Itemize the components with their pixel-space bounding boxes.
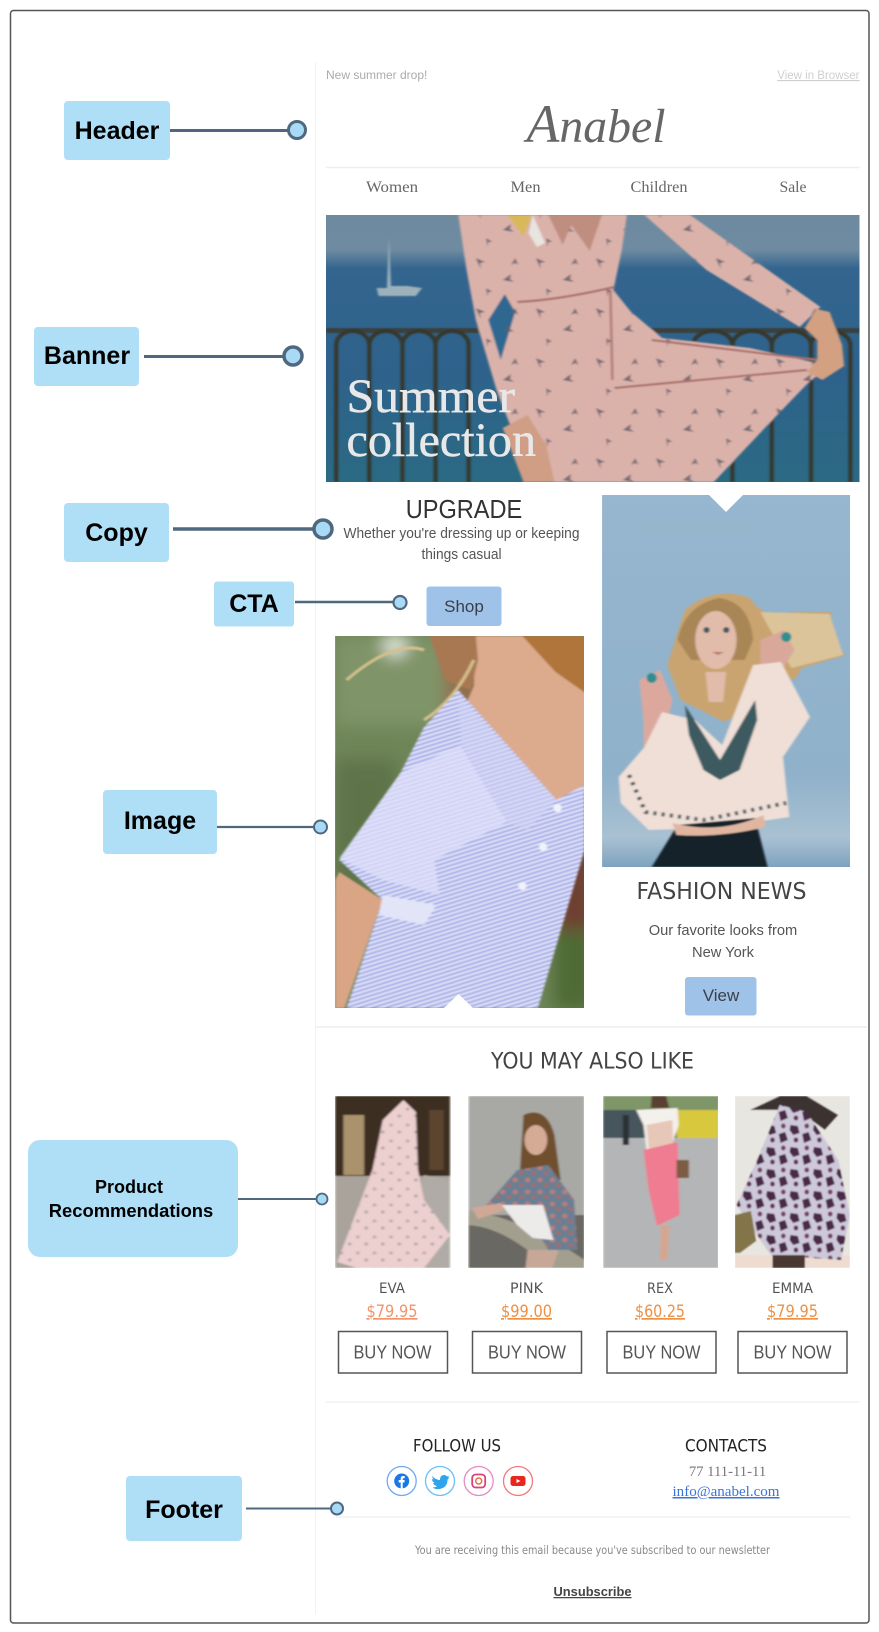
icon: instagram (464, 1466, 493, 1496)
hair (667, 594, 846, 722)
view in browser link: View in Browser (777, 70, 860, 82)
notch (444, 994, 473, 1008)
navigation menu: Sale (780, 179, 806, 196)
email link: info@anabel.com (672, 1484, 780, 1500)
product: Eva: EVA (379, 1281, 405, 1297)
callout: footer: Footer (145, 1496, 223, 1524)
callout: image (103, 790, 327, 854)
body copy: Our favorite looks from (649, 923, 797, 939)
copy block: upgrade: things casual (422, 547, 502, 563)
phone: 77 111-11-11 (689, 1464, 766, 1480)
follow us heading: FOLLOW US (413, 1436, 501, 1456)
copy block: upgrade (344, 494, 580, 563)
callout: banner: Banner (44, 342, 130, 370)
product: Pink: PINK (510, 1281, 544, 1297)
unsubscribe link: Unsubscribe (554, 1585, 632, 1599)
email header (326, 68, 860, 196)
product: Rex: $60.25 (635, 1302, 685, 1322)
button: shop: Shop (444, 597, 484, 616)
notch (709, 495, 743, 512)
callout: product recommendations (28, 1140, 328, 1257)
banner title: Summer (346, 370, 515, 423)
callout: cta: CTA (229, 590, 279, 618)
callout: copy (64, 503, 332, 562)
callout: header (64, 101, 306, 160)
navigation menu (366, 179, 806, 196)
email panel (315, 62, 868, 1614)
face and arms (695, 611, 737, 669)
heading: UPGRADE (406, 494, 522, 524)
navigation menu: Children (630, 179, 688, 196)
section heading: YOU MAY ALSO LIKE (490, 1050, 694, 1074)
button: view: View (703, 986, 740, 1005)
product: Eva: $79.95 (366, 1302, 418, 1322)
contacts heading: CONTACTS (685, 1436, 767, 1456)
heading: FASHION NEWS (636, 879, 806, 905)
banner image (326, 215, 877, 482)
copy block: fashion news (636, 879, 806, 961)
dress (458, 215, 844, 482)
disclaimer: You are receiving this email because you've subscribed to our newsletter (414, 1543, 770, 1557)
body copy: Whether you're dressing up or keeping (344, 526, 580, 542)
product: Emma: $79.95 (767, 1302, 818, 1322)
logo: Anabel (524, 94, 666, 154)
navigation menu: Men (510, 179, 540, 196)
product: Emma: BUY NOW (754, 1342, 832, 1362)
button: shop (426, 586, 502, 626)
icon: youtube (504, 1466, 532, 1496)
copy block: fashion news: New York (692, 945, 755, 961)
image: striped shirt (335, 633, 595, 1010)
callout: copy: Copy (85, 519, 148, 547)
banner title: collection (346, 414, 536, 467)
icon: twitter (426, 1466, 454, 1496)
image: fashion news model (602, 495, 867, 867)
product recommendations (335, 1050, 850, 1373)
hands (805, 309, 844, 380)
preheader text: New summer drop! (326, 68, 427, 82)
product: Pink: $99.00 (501, 1302, 552, 1322)
shirt (339, 690, 584, 1008)
navigation menu: Women (366, 179, 418, 196)
product: Pink: BUY NOW (488, 1342, 566, 1362)
callout: header: Header (75, 117, 160, 145)
icon: facebook (387, 1466, 416, 1496)
footer (336, 1436, 850, 1599)
callout: cta (214, 582, 406, 626)
product: Eva (335, 1096, 450, 1373)
blouse (619, 662, 810, 830)
product: Eva: BUY NOW (354, 1342, 432, 1362)
callout: product recommendations: Recommendations (49, 1200, 213, 1221)
product: Pink (469, 1096, 584, 1373)
callout: image: Image (124, 807, 196, 835)
product: Rex: REX (647, 1281, 673, 1297)
product: Emma (735, 1096, 850, 1373)
product: Rex: BUY NOW (622, 1342, 700, 1362)
callout: product recommendations: Product (95, 1177, 163, 1197)
product: Emma: EMMA (772, 1281, 813, 1297)
callout: footer (126, 1476, 343, 1541)
banner title (348, 380, 536, 457)
product: Rex (603, 1096, 719, 1373)
callout: banner (34, 327, 302, 386)
sailboat (377, 238, 422, 296)
button: view (685, 977, 756, 1016)
